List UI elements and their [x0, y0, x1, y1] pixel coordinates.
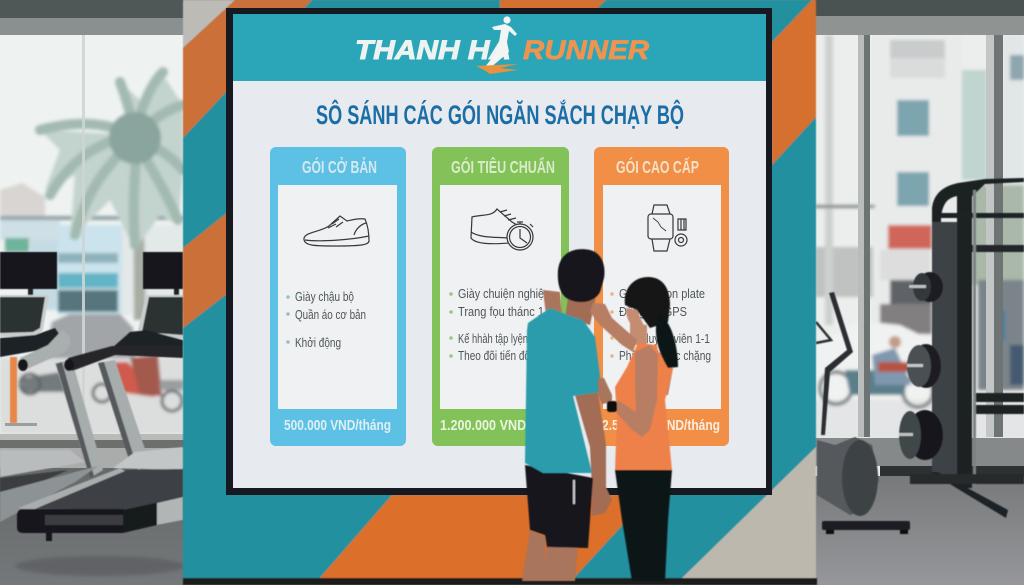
panel: premium plan: GÓI CAO CẤP: [616, 156, 699, 177]
elliptical machine: [816, 292, 910, 534]
plan features: [610, 287, 711, 363]
header banner with logo: THANH HA: [355, 35, 511, 65]
header banner with logo: RUNNER: [523, 35, 650, 65]
panel: standard plan: 1.200.000 VND/tháng: [440, 418, 564, 434]
plan features: Đồng hồ GPS: [619, 305, 687, 319]
icon: smartwatch with medal: [648, 205, 687, 251]
panel: basic plan: [270, 147, 406, 446]
plan features: Khởi động: [295, 336, 341, 350]
plan features: [449, 287, 550, 363]
plan features: Giày chuiện nghiệp: [458, 287, 550, 301]
panel: standard plan: [432, 147, 569, 446]
title: SÔ SÁNH CÁC GÓI NGĂN SẮCH CHẠY BỘ: [316, 99, 684, 130]
left window view: [0, 0, 184, 585]
panel: standard plan: GÓI TIÊU CHUẨN: [451, 156, 555, 177]
panel: basic plan: GÓI CỞ BẢN: [302, 156, 377, 177]
power rack and weight plates: [899, 178, 1024, 518]
plan features: Quần áo cơ bản: [295, 308, 366, 322]
icon: running shoe: [304, 216, 369, 246]
comparison board: [226, 8, 772, 495]
plan features: Kế hhàh tập lyện: [458, 332, 528, 346]
plan features: Trang fọu thánc 1: [458, 305, 544, 319]
panel: premium plan: [594, 147, 729, 446]
plan features: Phân tích các chặng: [619, 349, 711, 363]
header banner with logo: [233, 14, 766, 81]
woman in orange top: [590, 277, 678, 581]
right window view: [815, 0, 1024, 585]
plan features: Huấn luyện viên 1-1: [619, 332, 710, 346]
man in teal shirt: [522, 249, 612, 581]
icon: shoe with stopwatch: [471, 209, 533, 250]
panel: premium plan: 2.500.000 VND/tháng: [602, 418, 720, 434]
plan features: [286, 290, 366, 350]
treadmills: [0, 252, 185, 576]
plan features: Giày carbon plate: [619, 287, 705, 301]
panel: basic plan: 500.000 VND/tháng: [284, 418, 391, 434]
plan features: Theo đõi tiến độ: [458, 349, 530, 363]
plan features: Giày chậu bộ: [295, 290, 354, 304]
icon: runner figure: [476, 16, 518, 74]
wall background with diagonal bands: [183, 0, 817, 585]
